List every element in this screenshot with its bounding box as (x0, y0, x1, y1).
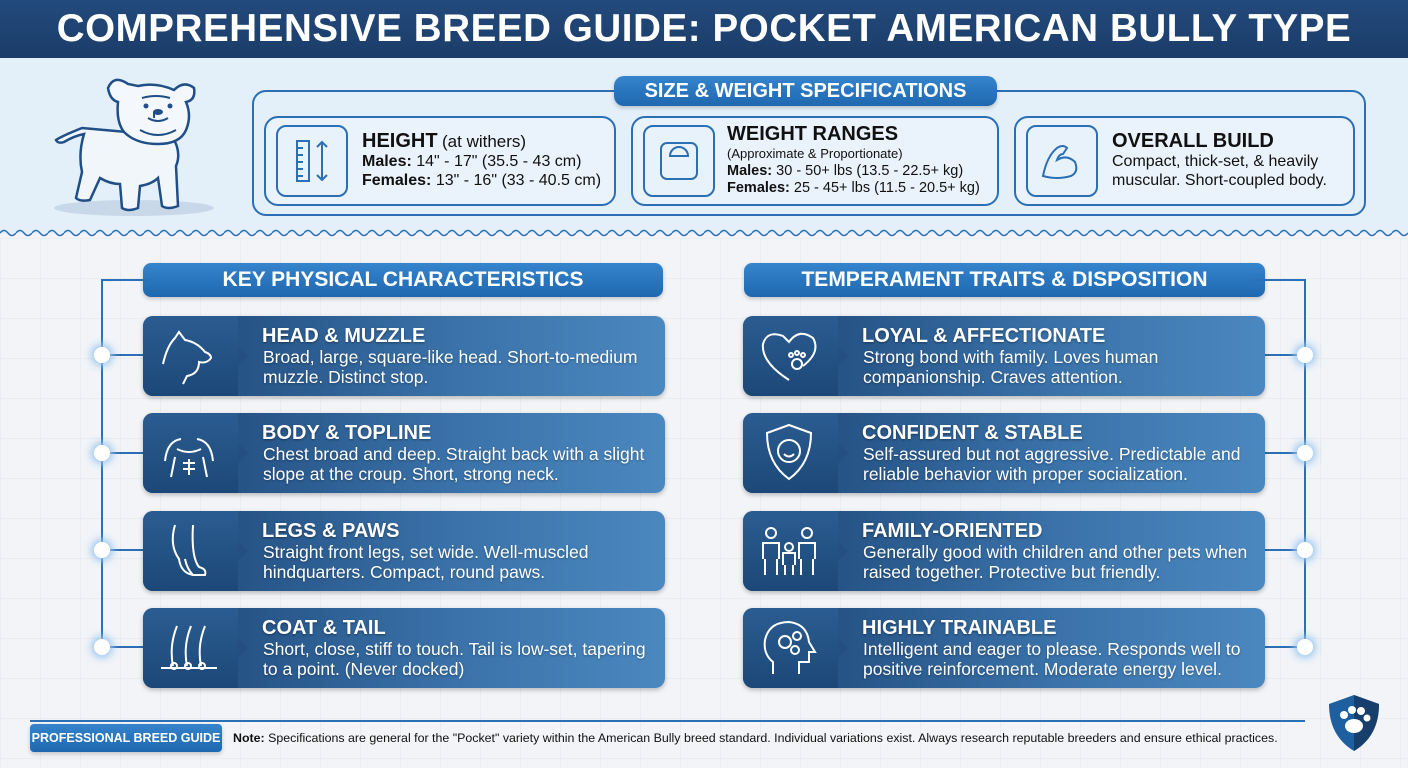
card: confident (743, 413, 1265, 493)
card: coat & tail: Short, close, stiff to touch. Tail is low-set, tapering to a point. (Never docked) (263, 639, 646, 679)
card: family: FAMILY-ORIENTED (862, 520, 1042, 542)
card: height (264, 116, 616, 206)
icon: shield (766, 424, 812, 480)
footer badge: PROFESSIONAL BREED GUIDE (32, 731, 220, 745)
card: loyal (743, 316, 1265, 396)
heading: size & weight: SIZE & WEIGHT SPECIFICATIONS (645, 80, 966, 102)
card: confident: CONFIDENT & STABLE (862, 422, 1083, 444)
text: height: HEIGHT (at withers) (362, 130, 526, 152)
heading: temperament: TEMPERAMENT TRAITS & DISPOSITION (801, 268, 1208, 291)
title: COMPREHENSIVE BREED GUIDE: POCKET AMERICAN BULLY TYPE (57, 7, 1351, 50)
icon: leg (172, 524, 206, 576)
bracket right (1255, 279, 1320, 662)
icon: muscle arm (1026, 125, 1098, 197)
footer note: Note: Specifications are general for the "Pocket" variety within the American Bully breed standard. Individual variations exist. Always research reputable breeders and ensure ethical practices. (233, 731, 1278, 745)
heading: size & weight (614, 76, 997, 106)
card: legs & paws: LEGS & PAWS (262, 520, 399, 542)
card: legs & paws: Straight front legs, set wide. Well-muscled hindquarters. Compact, round paws. (263, 542, 589, 582)
text: height: Males: 14" - 17" (35.5 - 43 cm) (362, 153, 581, 170)
card: body & topline (143, 413, 665, 493)
icon: head gears (764, 621, 817, 674)
card: head & muzzle: HEAD & MUZZLE (262, 325, 425, 347)
top band (0, 58, 1408, 234)
card: coat & tail (143, 608, 665, 688)
text: weight: WEIGHT RANGES (727, 122, 898, 144)
card: loyal: LOYAL & AFFECTIONATE (862, 325, 1105, 347)
text: weight (727, 122, 980, 196)
card: head & muzzle: Broad, large, square-like head. Short-to-medium muzzle. Distinct stop. (263, 347, 638, 387)
text: build: muscular. Short-coupled body. (1112, 172, 1327, 189)
card: family (743, 511, 1265, 591)
card: family: Generally good with children and other pets when raised together. Protective but friendly. (863, 542, 1247, 582)
icon: dog illustration (54, 78, 214, 216)
card: coat & tail: COAT & TAIL (262, 617, 386, 639)
text: build (1112, 130, 1327, 189)
text: build: OVERALL BUILD (1112, 130, 1274, 152)
icon: hair (161, 626, 217, 670)
text: height (362, 130, 601, 189)
icon: heart paw (762, 332, 816, 381)
card: loyal: Strong bond with family. Loves human companionship. Craves attention. (863, 347, 1158, 387)
text: weight: (Approximate & Proportionate) (727, 146, 903, 160)
title (0, 0, 1408, 58)
icon: shield paw (1329, 695, 1379, 751)
footer badge (30, 724, 222, 752)
text: weight: Males: 30 - 50+ lbs (13.5 - 22.5+ kg) (727, 162, 963, 178)
text: height: Females: 13" - 16" (33 - 40.5 cm) (362, 172, 601, 189)
card: trainable: Intelligent and eager to please. Responds well to positive reinforcement. Moderate energy level. (863, 639, 1240, 679)
icon: torso (164, 438, 214, 478)
heading: physical characteristics (143, 263, 663, 297)
card: build (1014, 116, 1355, 206)
icon: scale (643, 125, 715, 197)
card: trainable: HIGHLY TRAINABLE (862, 617, 1056, 639)
footer line (30, 720, 1305, 722)
bracket left (86, 279, 149, 662)
card: trainable (743, 608, 1265, 688)
card: legs & paws (143, 511, 665, 591)
heading: temperament (744, 263, 1265, 297)
card: body & topline: BODY & TOPLINE (262, 422, 431, 444)
heading: physical characteristics: KEY PHYSICAL CHARACTERISTICS (223, 268, 583, 291)
card: confident: Self-assured but not aggressive. Predictable and reliable behavior with proper socialization. (863, 444, 1240, 484)
text: weight: Females: 25 - 45+ lbs (11.5 - 20.5+ kg) (727, 180, 980, 196)
icon: ruler (276, 125, 348, 197)
text: build: Compact, thick-set, & heavily (1112, 153, 1318, 170)
panel: size & weight (252, 90, 1366, 216)
icon: dog head (162, 330, 212, 384)
card: weight (631, 116, 999, 206)
card: head & muzzle (143, 316, 665, 396)
card: body & topline: Chest broad and deep. Straight back with a slight slope at the croup. Short, strong neck. (263, 444, 644, 484)
icon: family (762, 527, 816, 575)
